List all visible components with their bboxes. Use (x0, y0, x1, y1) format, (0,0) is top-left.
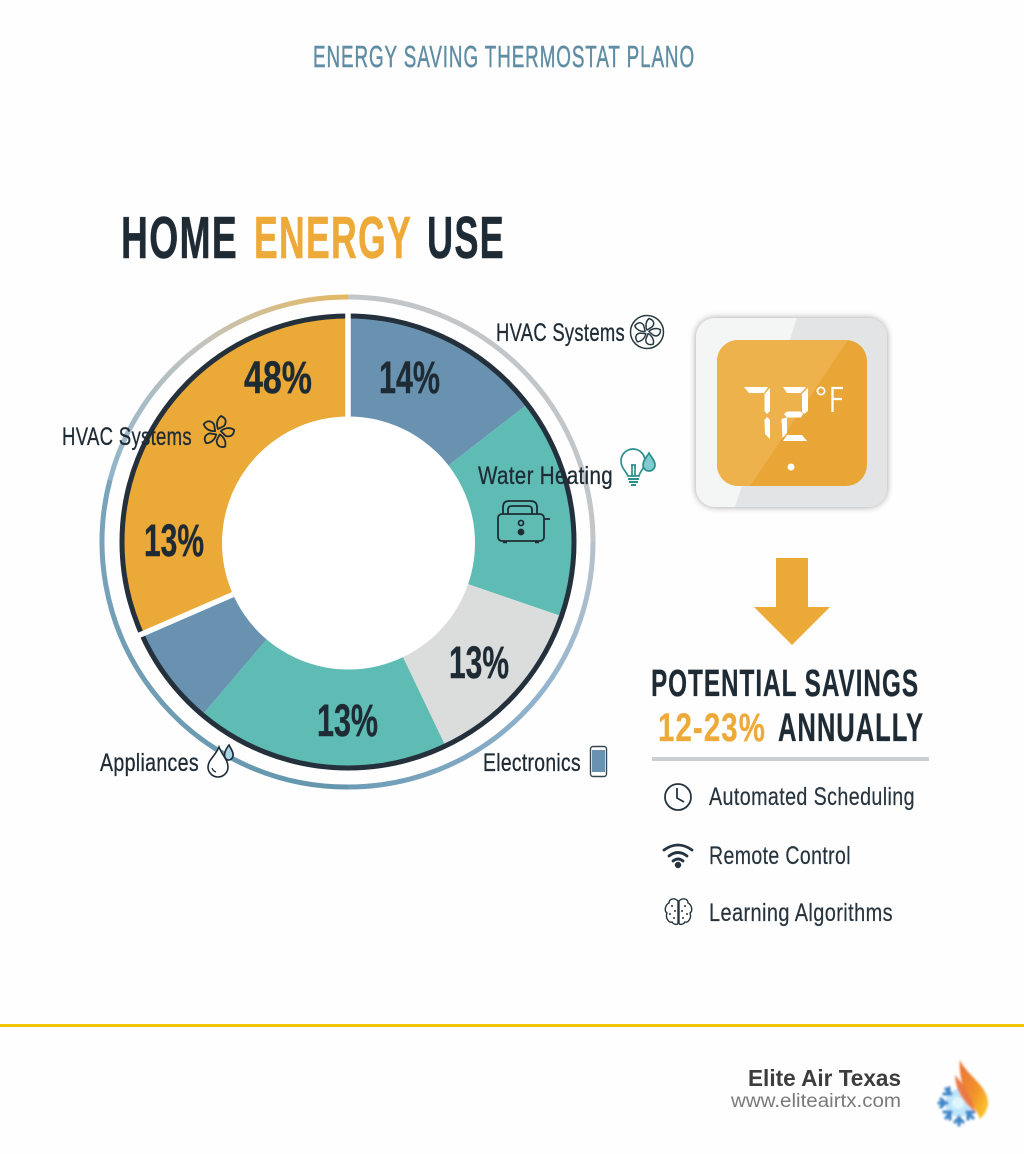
savings heading (651, 663, 924, 750)
segment gaps (126, 306, 348, 641)
icon: clock (665, 784, 691, 810)
heading: home energy use: ENERGY (254, 205, 412, 271)
donut hole (222, 416, 475, 670)
dark ring (122, 316, 574, 768)
heading: home energy use: HOME (121, 205, 238, 271)
degree F unit (817, 387, 843, 412)
label: appliances: Appliances (100, 749, 199, 777)
header title: ENERGY SAVING THERMOSTAT PLANO (313, 39, 695, 74)
screen glare (717, 340, 848, 486)
icon: phone (590, 746, 606, 776)
icon: fan left (202, 416, 236, 449)
value: 13% grey: 13% (449, 637, 509, 688)
value: 14%: 14% (379, 352, 440, 403)
device glare (696, 318, 797, 507)
icon: toaster (498, 501, 550, 542)
value: 13% bottom: 13% (317, 695, 378, 746)
feature: learning algorithms: Learning Algorithms (709, 899, 893, 927)
footer brand: www.eliteairtx.com (730, 1091, 901, 1112)
footer brand: Elite Air Texas (748, 1065, 901, 1091)
segment: teal water heating (348, 403, 576, 617)
footer brand (730, 1065, 901, 1112)
segment: blue 14% (348, 314, 529, 543)
heading: home energy use (121, 205, 505, 271)
feature: automated scheduling: Automated Scheduling (709, 783, 915, 811)
donut chart (102, 297, 593, 787)
segment: grey electronics (348, 543, 563, 748)
temperature readout 72°F (744, 387, 808, 470)
display screen (717, 340, 867, 486)
feature: learning algorithms (665, 899, 893, 927)
arrow down (754, 558, 830, 645)
segment: teal lower (201, 543, 446, 770)
thermostat device (696, 318, 887, 507)
savings heading: ANNUALLY (778, 706, 924, 750)
feature: automated scheduling (665, 783, 915, 811)
device body (696, 318, 887, 507)
label: water heating: Water Heating (478, 462, 613, 490)
label: electronics: Electronics (483, 749, 581, 777)
savings heading: 12-23% (658, 706, 766, 750)
icon: water drops (208, 745, 233, 777)
value: 48%: 48% (244, 352, 312, 403)
outer gradient ring (102, 297, 593, 787)
icon: wifi (664, 845, 692, 867)
footer rule (0, 1024, 1024, 1027)
icon: light bulb with water drop (621, 449, 655, 485)
segment: blue lower (139, 543, 348, 716)
value: 13% left: 13% (144, 515, 204, 566)
icon: fan in circle (630, 316, 664, 348)
divider (652, 757, 929, 761)
icon: brain (665, 899, 692, 924)
segment: orange 48% (120, 314, 348, 634)
label: HVAC systems right: HVAC Systems (496, 319, 625, 347)
heading: home energy use: USE (427, 205, 505, 271)
label: HVAC systems left: HVAC Systems (62, 423, 192, 451)
logo: flame and snowflake (939, 1060, 988, 1125)
feature: remote control (664, 842, 851, 870)
feature: remote control: Remote Control (709, 842, 851, 870)
